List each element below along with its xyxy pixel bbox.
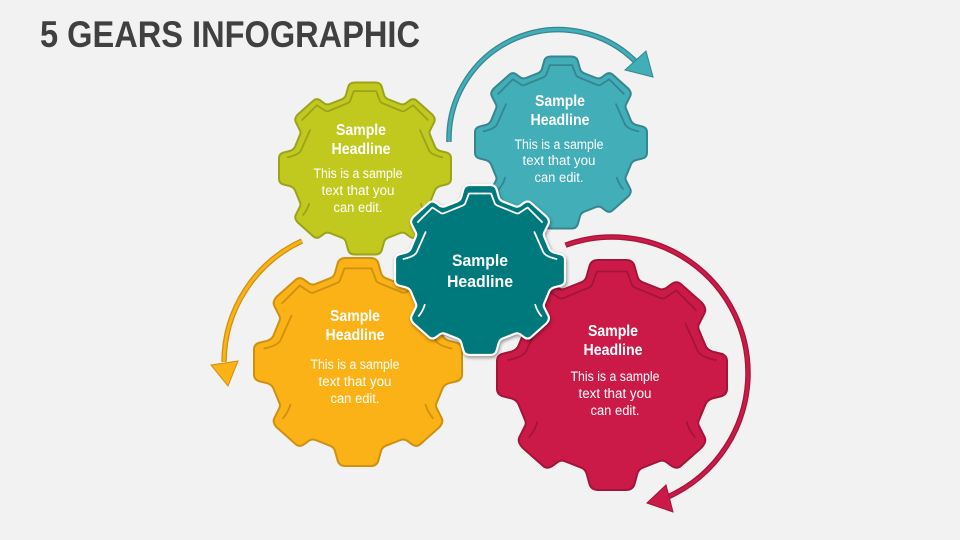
arrow: red curved arrow xyxy=(566,237,748,512)
green gear body text: can edit. xyxy=(334,200,382,215)
gear: center xyxy=(395,185,565,355)
red gear headline xyxy=(584,323,643,359)
gear: red xyxy=(497,260,727,490)
arrow: yellow curved arrow xyxy=(211,241,302,386)
red gear body text: can edit. xyxy=(590,403,640,418)
teal gear body text: This is a sample xyxy=(514,137,604,152)
gear: teal xyxy=(475,56,647,228)
yellow gear headline: Sample xyxy=(330,308,380,325)
gear: green xyxy=(279,82,451,254)
center gear headline xyxy=(447,251,513,291)
red gear body text xyxy=(570,369,660,418)
green gear body text xyxy=(314,166,402,215)
arrow: teal curved arrow xyxy=(449,30,653,142)
center gear headline: Headline xyxy=(447,272,513,291)
green gear body text: This is a sample xyxy=(314,166,402,181)
yellow gear body text: can edit. xyxy=(330,391,380,406)
green gear headline: Sample xyxy=(336,122,386,139)
yellow gear headline xyxy=(326,308,385,344)
red gear headline: Headline xyxy=(584,342,643,359)
yellow gear body text: This is a sample xyxy=(310,357,400,372)
teal gear headline: Headline xyxy=(530,112,590,129)
teal gear headline xyxy=(530,93,590,129)
gear: yellow xyxy=(254,258,462,466)
green gear body text: text that you xyxy=(322,183,394,198)
red gear headline: Sample xyxy=(588,323,638,340)
yellow gear body text: text that you xyxy=(318,374,392,389)
green gear headline xyxy=(332,122,391,158)
green gear headline: Headline xyxy=(332,141,391,158)
title: 5 GEARS INFOGRAPHIC xyxy=(40,14,420,55)
teal gear headline: Sample xyxy=(535,93,585,110)
red gear body text: text that you xyxy=(578,386,652,401)
yellow gear body text xyxy=(310,357,400,406)
yellow gear headline: Headline xyxy=(326,327,385,344)
center gear headline: Sample xyxy=(452,251,508,270)
teal gear body text: text that you xyxy=(522,153,596,168)
teal gear body text xyxy=(514,137,604,185)
teal gear body text: can edit. xyxy=(534,170,584,185)
red gear body text: This is a sample xyxy=(570,369,660,384)
